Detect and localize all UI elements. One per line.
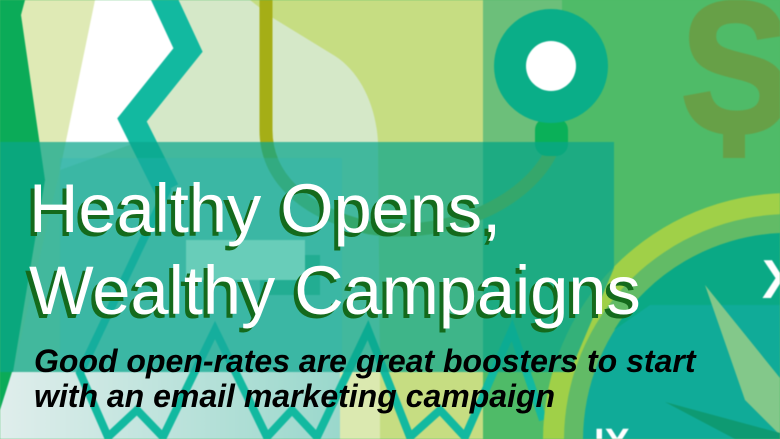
- subtitle: Good open-rates are great boosters to start: [34, 343, 695, 379]
- upper thick zigzag: [132, 0, 188, 190]
- icon: olive cord: [266, 0, 552, 230]
- icon: teal zigzag line: [80, 0, 543, 437]
- icon: pin stem: [535, 118, 568, 156]
- subtitle: [34, 343, 697, 414]
- title: Wealthy Campaigns: [29, 252, 641, 329]
- title: Healthy Opens,: [29, 170, 501, 247]
- light rectangle: [186, 240, 305, 280]
- clock hand light: [705, 285, 780, 435]
- clock hand dark: [665, 402, 780, 439]
- icon: pin circle: [494, 9, 608, 123]
- clock: [543, 193, 780, 439]
- title: [25, 170, 641, 332]
- inner panel tint: [60, 158, 342, 372]
- dark rectangle: [260, 255, 320, 295]
- translucent teal panel: [0, 142, 614, 372]
- subtitle: with an email marketing campaign: [34, 378, 555, 414]
